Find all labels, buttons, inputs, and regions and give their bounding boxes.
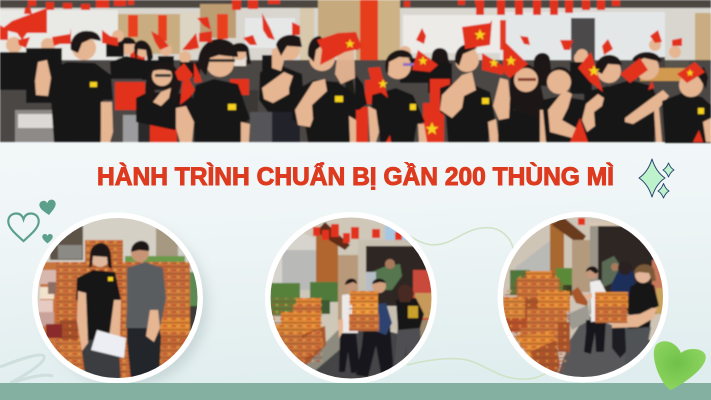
photo circle 3: carrying boxes by the truck [498, 212, 668, 382]
team member 4 [259, 35, 304, 112]
team member 2 seated [136, 62, 194, 130]
white ring [32, 212, 203, 384]
team member 11 [604, 52, 669, 142]
soft shadow [44, 223, 208, 387]
back row crowd [0, 30, 689, 103]
decorative brush strokes bottom left [0, 355, 53, 383]
photo: team waving flags [0, 0, 711, 143]
team member 12 [662, 67, 711, 143]
boy with small box [571, 266, 606, 354]
team member 6 [335, 50, 427, 142]
flags [0, 6, 705, 142]
photo content [270, 218, 432, 378]
team member 5 [292, 36, 356, 142]
team member 1 [35, 31, 113, 142]
icon: outline heart [8, 214, 39, 241]
carried box [595, 292, 628, 323]
paper [91, 330, 126, 358]
team member 8 [493, 64, 549, 142]
boy in white shirt [338, 278, 359, 373]
team member 9 [542, 67, 592, 142]
red banners and monitors [18, 79, 450, 142]
icon: green heart [654, 341, 706, 390]
team member 7 [440, 44, 499, 142]
bunting row [28, 0, 620, 15]
worker in truck [602, 256, 622, 288]
woman in black with bag [394, 285, 424, 367]
title: HÀNH TRÌNH CHUẨN BỊ GẦN 200 THÙNG MÌ [97, 161, 614, 191]
bottom band [0, 383, 711, 400]
man in grey sweater [126, 241, 166, 381]
photo content [35, 215, 200, 382]
stacked boxes [503, 271, 570, 378]
woman in black polo [76, 243, 121, 382]
left edge person [355, 74, 367, 110]
team member 10 [582, 55, 632, 142]
man in blue [611, 261, 637, 358]
man carrying boxes [356, 279, 393, 379]
photo circle 2: unloading the truck [265, 212, 440, 390]
photo content [503, 217, 663, 377]
white ring [498, 212, 668, 382]
photo circle 1: two staff by the noodle boxes [32, 212, 208, 387]
icon: sparkles [639, 159, 674, 198]
decorative green squiggle lines [407, 228, 547, 379]
woman in black polo [612, 264, 659, 368]
icon: filled heart large [39, 199, 57, 216]
white ring [265, 212, 437, 384]
worker in truck [366, 259, 402, 298]
stacked boxes [272, 298, 326, 366]
office backdrop [0, 0, 711, 142]
carried box stack [349, 291, 379, 331]
team member 3 [176, 39, 250, 142]
bunting flags [313, 224, 402, 243]
icon: filled heart small [42, 234, 53, 244]
